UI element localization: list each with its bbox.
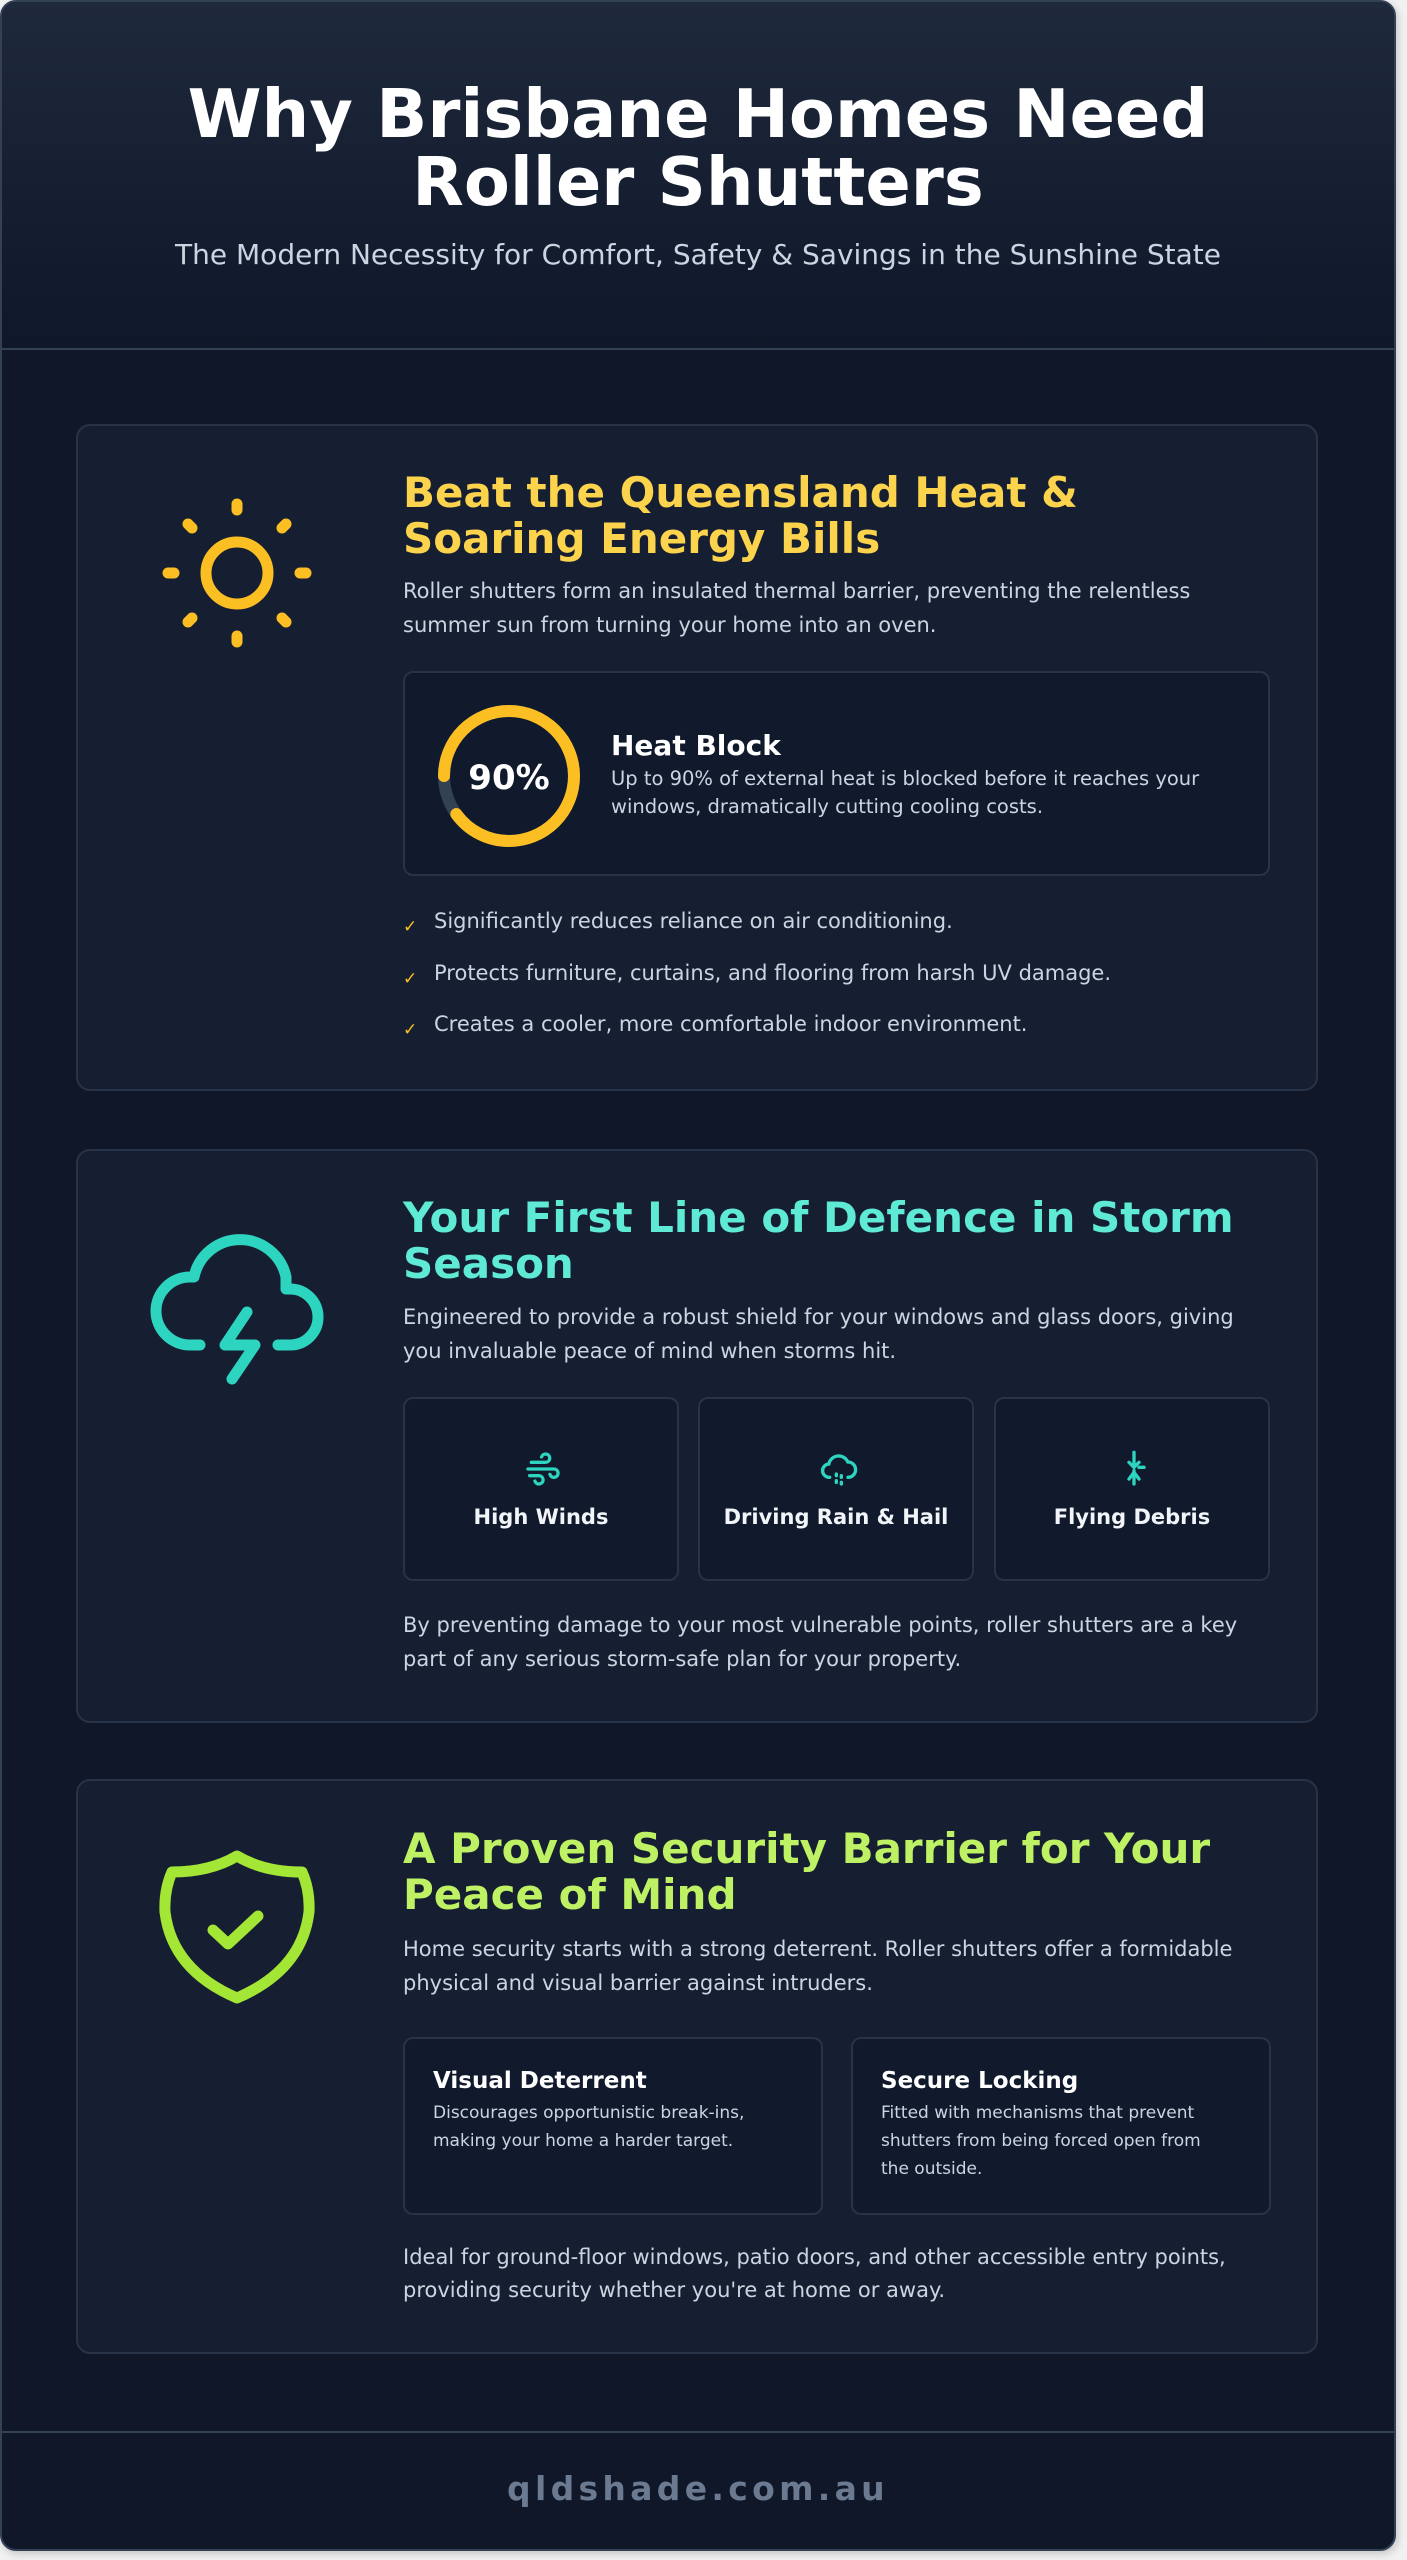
title: Why Brisbane Homes Need: [188, 75, 1208, 153]
checklist: [403, 909, 1111, 1040]
icon: wind: [526, 1452, 560, 1486]
checklist: ✓: [403, 1020, 417, 1040]
checklist: Significantly reduces reliance on air conditioning.: [434, 909, 953, 933]
icon: sun: [162, 498, 312, 648]
chart: 90% ring: [438, 705, 580, 847]
text: security intro: Home security starts with a strong deterrent. Roller shutters offer a formidable physical and visual barrier against intruders.: [403, 1937, 1232, 1995]
heading: storm: [402, 1193, 1234, 1288]
icon: cloud rain: [820, 1454, 858, 1486]
box text: Fitted with mechanisms that prevent shutters from being forced open from the outside.: [881, 2103, 1201, 2179]
heading: security: [403, 1824, 1210, 1919]
icon: shield check: [159, 1850, 315, 2004]
checklist: Creates a cooler, more comfortable indoor environment.: [434, 1012, 1027, 1036]
box title: Secure Locking: [881, 2068, 1078, 2094]
icon: storm cloud: [150, 1234, 324, 1384]
stat box: heat block: [403, 671, 1270, 876]
box: secure locking: [851, 2037, 1271, 2215]
panel: heat: [76, 424, 1318, 1091]
box text: Discourages opportunistic break-ins, making your home a harder target.: [433, 2103, 744, 2151]
box: visual deterrent: [403, 2037, 823, 2215]
text: security note: Ideal for ground-floor windows, patio doors, and other accessible entry points, providing security whether you're at home or away.: [403, 2245, 1226, 2302]
label: Flying Debris: [1054, 1505, 1210, 1529]
checklist: Protects furniture, curtains, and flooring from harsh UV damage.: [434, 961, 1111, 985]
panel: storm: [76, 1149, 1318, 1723]
box: flying debris: [994, 1397, 1270, 1581]
heading: heat: [403, 468, 1078, 563]
heading: storm: Season: [403, 1239, 574, 1288]
text: heat intro: Roller shutters form an insulated thermal barrier, preventing the relentless summer sun from turning your home into an oven.: [403, 579, 1190, 637]
panel: security: [76, 1779, 1318, 2354]
chart: 90% ring: 90%: [468, 758, 550, 798]
box title: Visual Deterrent: [433, 2068, 647, 2094]
label: Driving Rain & Hail: [724, 1505, 948, 1529]
heading: security: A Proven Security Barrier for Your: [403, 1824, 1210, 1873]
icon: debris: [1127, 1450, 1146, 1486]
stat title: Heat Block: [611, 729, 781, 762]
heading: heat: Soaring Energy Bills: [403, 514, 880, 563]
box: high winds: [403, 1397, 679, 1581]
title: [188, 75, 1208, 221]
text: storm intro: Engineered to provide a robust shield for your windows and glass doors, giving you invaluable peace of mind when storms hit.: [403, 1305, 1234, 1363]
text: storm note: By preventing damage to your most vulnerable points, roller shutters are a key part of any serious storm-safe plan for your property.: [403, 1613, 1237, 1671]
footer: website: qldshade.com.au: [507, 2469, 889, 2508]
subtitle: The Modern Necessity for Comfort, Safety & Savings in the Sunshine State: [175, 238, 1221, 271]
title: Roller Shutters: [412, 143, 984, 221]
heading: security: Peace of Mind: [403, 1870, 737, 1919]
checklist: ✓: [403, 917, 417, 937]
box: rain & hail: [698, 1397, 974, 1581]
heading: heat: Beat the Queensland Heat &: [403, 468, 1078, 517]
label: High Winds: [474, 1505, 608, 1529]
heading: storm: Your First Line of Defence in Storm: [403, 1193, 1234, 1242]
checklist: ✓: [403, 969, 417, 989]
stat description: Up to 90% of external heat is blocked before it reaches your windows, dramatically cutting cooling costs.: [611, 767, 1199, 818]
